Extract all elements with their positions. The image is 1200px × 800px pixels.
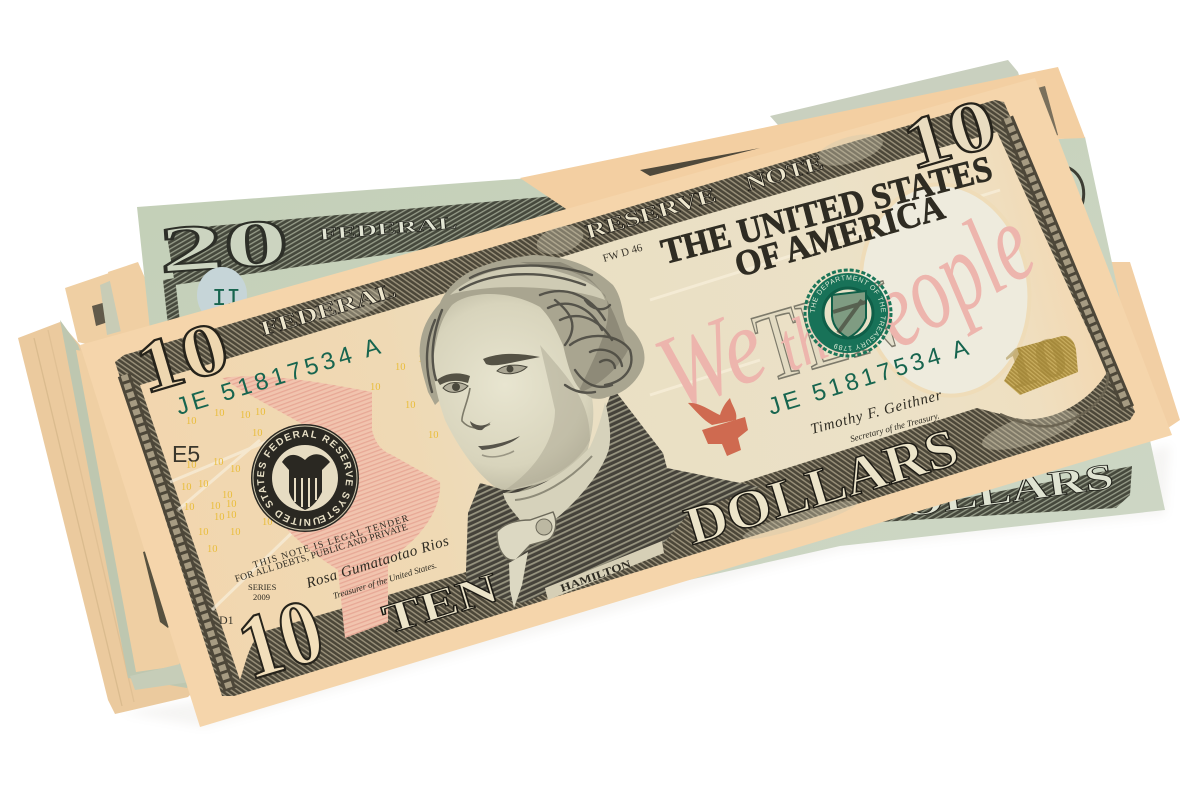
middle tan bill bbox=[520, 67, 1085, 225]
bow tie bbox=[497, 512, 556, 560]
yellow 10 microprint: 10 bbox=[198, 479, 208, 490]
printed area bbox=[115, 100, 1135, 696]
cravat tail bbox=[509, 552, 528, 608]
top band of the twenty bbox=[166, 192, 600, 285]
legal tender text: FOR ALL DEBTS, PUBLIC AND PRIVATE bbox=[234, 522, 409, 585]
right frame strip bbox=[1007, 118, 1128, 408]
hair curls bbox=[427, 266, 631, 393]
big 20 numeral: 20 bbox=[156, 206, 291, 287]
HAMILTON label bbox=[545, 541, 664, 600]
yellow 10 microprint: 10 bbox=[184, 502, 194, 513]
serial number left: JE 51817534 A bbox=[173, 333, 383, 421]
secretary signature: Timothy F. Geithner bbox=[809, 387, 944, 438]
FEDERAL label on twenty: FEDERAL bbox=[319, 213, 458, 244]
paper bbox=[80, 78, 1172, 727]
yellow 10 microprint: 10 bbox=[198, 527, 208, 538]
yellow 10 microprint: 10 bbox=[226, 499, 236, 510]
face bbox=[433, 294, 593, 490]
left frame strip bbox=[124, 375, 230, 690]
yellow 10 microprint: 10 bbox=[210, 501, 220, 512]
yellow 10 microprint: 10 bbox=[395, 362, 406, 373]
yellow 10 microprint: 10 bbox=[226, 510, 236, 521]
yellow 10 microprint: 10 bbox=[207, 544, 218, 555]
drop shadow bbox=[120, 445, 1170, 727]
corner numeral top right: 10 bbox=[894, 83, 1005, 185]
We the People script: the bbox=[767, 289, 861, 387]
yellow 10 microprint: 10 bbox=[418, 354, 428, 365]
header text: OF AMERICA bbox=[730, 187, 949, 285]
green bill strip bbox=[60, 320, 195, 688]
dark fragment bbox=[92, 302, 108, 326]
nose bbox=[462, 388, 490, 428]
FEDERAL RESERVE NOTE band text: NOTE bbox=[743, 150, 826, 196]
yellow 10 microprint: 10 bbox=[222, 490, 232, 501]
blue oval bbox=[197, 267, 247, 323]
plate position: FW D 46 bbox=[601, 242, 644, 265]
HAMILTON label: HAMILTON bbox=[559, 558, 633, 595]
yellow 10 microprint: 10 bbox=[428, 430, 438, 441]
green treasury seal: THE DEPARTMENT OF THE TREASURY 1789 bbox=[810, 275, 886, 351]
yellow 10 microprint bbox=[181, 354, 438, 555]
small red torch bbox=[688, 398, 748, 456]
DOLLARS fragment on twenty: OLLARS bbox=[901, 456, 1116, 525]
green serial fragment: II bbox=[212, 286, 241, 313]
We the People script: eople bbox=[848, 182, 1053, 372]
yellow 10 microprint: 10 bbox=[186, 460, 196, 471]
We the People script: We bbox=[640, 285, 781, 434]
yellow 10 microprint: 10 bbox=[240, 410, 250, 421]
yellow 10 microprint: 10 bbox=[214, 408, 224, 419]
plate letter: D1 bbox=[219, 613, 234, 627]
treasurer signature: Treasurer of the United States. bbox=[332, 560, 438, 601]
FEDERAL RESERVE NOTE band text bbox=[258, 150, 826, 341]
faint TEN behind seal: TEN bbox=[743, 258, 909, 403]
mouth bbox=[478, 436, 520, 450]
legal tender text: SERIES bbox=[248, 582, 277, 592]
FEDERAL RESERVE NOTE band text: FEDERAL bbox=[258, 278, 399, 341]
DOLLARS band lettering: DOLLARS bbox=[678, 417, 965, 556]
left frame of twenty bbox=[163, 278, 180, 325]
secretary signature: Secretary of the Treasury. bbox=[849, 410, 940, 444]
right eyebrow bbox=[483, 354, 540, 365]
right tan bill corner bbox=[1095, 262, 1180, 440]
legal tender text: 2009 bbox=[253, 592, 270, 602]
yellow 10 microprint: 10 bbox=[370, 382, 380, 393]
legal tender text: THIS NOTE IS LEGAL TENDER bbox=[252, 513, 410, 571]
right eye bbox=[497, 365, 527, 374]
yellow 10 microprint: 10 bbox=[252, 428, 262, 439]
yellow 10 microprint: 10 bbox=[214, 512, 224, 523]
yellow 10 microprint: 10 bbox=[255, 407, 266, 418]
right edge print of twenty bbox=[1055, 165, 1084, 240]
treasurer signature: Rosa Gumataotao Rios bbox=[304, 533, 451, 592]
left eye bbox=[443, 382, 468, 392]
coat bbox=[466, 388, 760, 603]
portrait of Hamilton bbox=[420, 255, 760, 608]
pale field rays bbox=[170, 190, 1000, 610]
gold 10 bbox=[1004, 336, 1078, 395]
series code E5: E5 bbox=[172, 441, 200, 467]
lower tan bill bbox=[76, 350, 195, 672]
FEDERAL RESERVE NOTE band text: RESERVE bbox=[583, 182, 719, 244]
corner numeral bottom left: 10 bbox=[227, 578, 334, 699]
yellow 10 microprint: 10 bbox=[181, 482, 192, 493]
corner numeral top left: 10 bbox=[127, 306, 238, 410]
yellow 10 microprint: 10 bbox=[262, 517, 272, 528]
yellow 10 microprint: 10 bbox=[213, 457, 224, 468]
back green bill edge bbox=[770, 60, 1030, 150]
header text: THE UNITED STATES bbox=[657, 148, 996, 272]
yellow 10 microprint: 10 bbox=[230, 527, 240, 538]
corner scroll bbox=[1000, 372, 1108, 426]
left stack of tan bills bbox=[18, 262, 195, 714]
dark frame corner bbox=[1030, 86, 1058, 140]
right oval watermark bbox=[847, 173, 1043, 407]
hair highlights bbox=[450, 266, 605, 300]
serial number right: JE 51817534 A bbox=[765, 334, 972, 421]
moire highlights bbox=[308, 128, 1082, 545]
twenty dollar bill bbox=[137, 137, 1165, 690]
yellow 10 microprint: 10 bbox=[186, 416, 196, 427]
left eyebrow bbox=[437, 373, 470, 385]
note field bbox=[140, 132, 1107, 680]
yellow 10 microprint: 10 bbox=[230, 464, 240, 475]
yellow 10 microprint: 10 bbox=[405, 400, 416, 411]
TEN band lettering: TEN bbox=[377, 565, 504, 644]
hair mass bbox=[420, 255, 645, 405]
cravat bbox=[503, 402, 610, 525]
main ten dollar bill: 10 bbox=[995, 322, 1075, 402]
cheek shading bbox=[505, 345, 590, 490]
We the People script bbox=[640, 182, 1053, 434]
bottom band of twenty bbox=[860, 466, 1132, 522]
large pink torch watermark bbox=[222, 376, 440, 638]
